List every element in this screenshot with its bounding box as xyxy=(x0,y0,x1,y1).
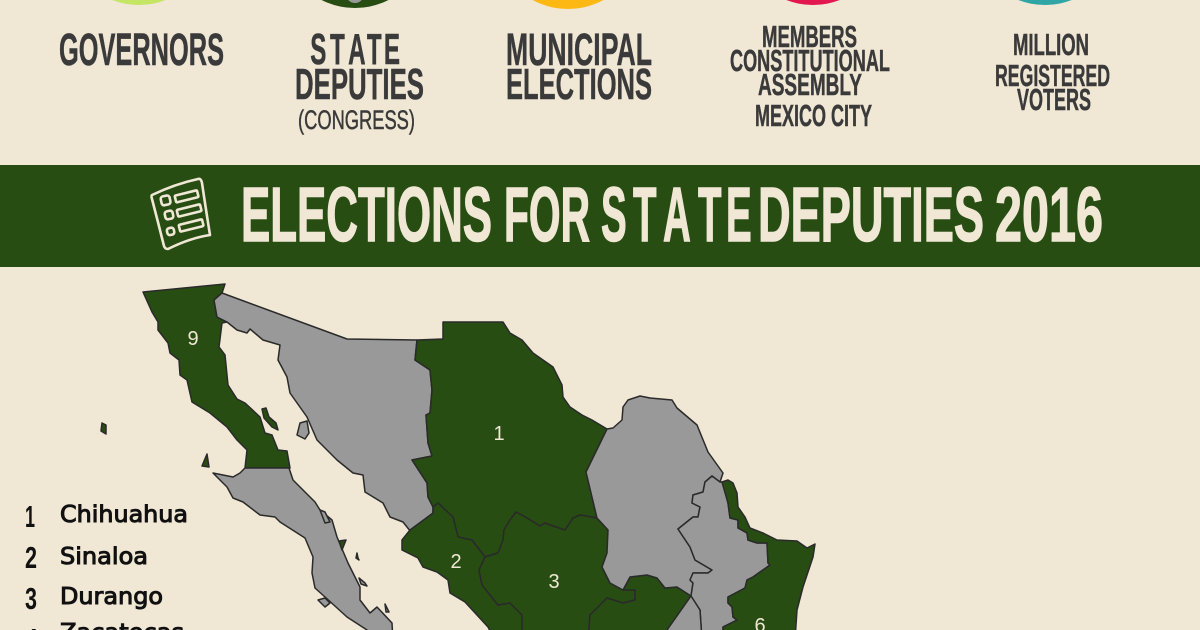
category: constitutional assembly xyxy=(730,0,890,133)
state numbers on the map: 1 xyxy=(493,423,505,445)
category: registered voters: MILLION xyxy=(1013,27,1089,62)
state numbers on the map: 9 xyxy=(187,328,199,350)
category: state deputies: DEPUTIES xyxy=(295,60,424,109)
legend of states: 2 xyxy=(25,540,37,575)
category: constitutional assembly: MEXICO CITY xyxy=(755,98,872,133)
legend of states: 1 xyxy=(25,499,35,534)
banner xyxy=(0,165,1200,267)
state: Tamaulipas (6) xyxy=(722,480,815,630)
state: San Luis Potosi xyxy=(660,596,702,630)
category: municipal elections: MUNICIPAL xyxy=(506,24,652,75)
banner title: FOR xyxy=(504,172,590,258)
category: municipal elections xyxy=(494,0,652,109)
category: state deputies xyxy=(281,0,429,135)
map of northern Mexico xyxy=(101,284,815,630)
state numbers on the map: 3 xyxy=(548,571,560,593)
state numbers on the map: 2 xyxy=(450,551,462,573)
category: state deputies: STATE xyxy=(310,24,400,74)
state: Baja California (9) xyxy=(143,284,290,468)
legend of states: 3 xyxy=(25,581,37,616)
legend of states: Durango xyxy=(60,584,163,610)
state: Coahuila xyxy=(586,396,723,596)
state: Durango (3) xyxy=(479,512,635,630)
state: Zacatecas (4) xyxy=(588,575,691,630)
category: constitutional assembly: MEMBERS xyxy=(762,19,857,54)
banner title: STATE xyxy=(601,171,752,257)
category: registered voters xyxy=(971,0,1119,117)
category: registered voters: VOTERS xyxy=(1017,82,1091,117)
banner title xyxy=(241,171,1103,258)
state: Nuevo Leon xyxy=(678,476,770,630)
state: Sonora xyxy=(214,293,433,532)
icon: ballot checklist xyxy=(152,179,210,249)
category: state deputies: (CONGRESS) xyxy=(298,105,415,135)
category: constitutional assembly: ASSEMBLY xyxy=(758,67,862,102)
category: governors xyxy=(59,0,224,75)
state: Baja California Sur xyxy=(213,468,393,630)
islands xyxy=(101,408,389,612)
state: Sinaloa (2) xyxy=(402,503,522,630)
state numbers on the map xyxy=(187,328,766,630)
legend of states: Sinaloa xyxy=(60,544,148,570)
category: constitutional assembly: CONSTITUTIONAL xyxy=(730,43,890,78)
banner title: ELECTIONS xyxy=(241,172,492,258)
legend of states xyxy=(25,499,188,630)
legend of states: Chihuahua xyxy=(60,502,188,528)
category: governors: GOVERNORS xyxy=(59,24,224,75)
banner title: DEPUTIES xyxy=(758,172,984,258)
banner title: 2016 xyxy=(995,172,1103,258)
category: municipal elections: ELECTIONS xyxy=(506,60,652,109)
state: Chihuahua (1) xyxy=(412,322,607,557)
category: registered voters: REGISTERED xyxy=(995,58,1110,93)
